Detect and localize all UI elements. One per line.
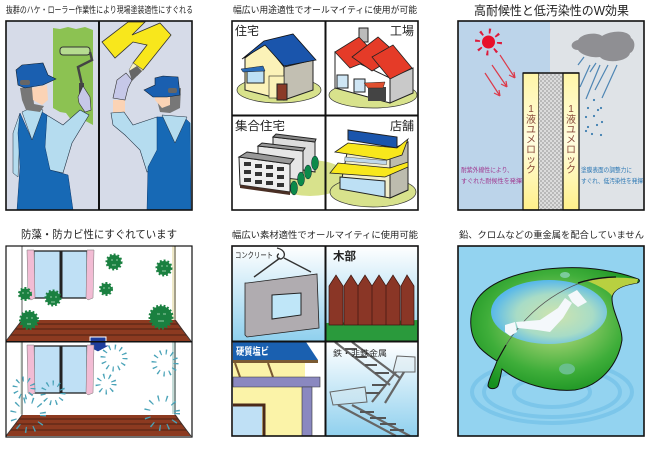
- icon: right worker: [111, 73, 191, 210]
- label: apartment: 集合住宅: [235, 118, 285, 133]
- room: before: [6, 246, 191, 341]
- panel: brush and roller painters: [6, 21, 192, 210]
- label: coating right: ク: [566, 164, 576, 176]
- cell: metal stairs: [326, 342, 418, 437]
- cell: rigid PVC: [232, 342, 325, 437]
- label: coating left: メ: [526, 135, 536, 146]
- icon: sun: [478, 31, 500, 53]
- label: house: 住宅: [235, 24, 259, 38]
- icon: house: [237, 34, 321, 103]
- icon: apartment blocks: [239, 134, 348, 196]
- caption: UV resistance: 耐紫外線性により、: [461, 165, 513, 174]
- icon: map of Japan: [505, 290, 587, 336]
- cell: metal stairs: 鉄・非鉄金属: [333, 348, 387, 358]
- icon: mold removed rings: [13, 347, 177, 430]
- icon: left worker: [13, 63, 91, 210]
- panel: building types: [232, 21, 418, 210]
- caption: stain resistance: すぐれ、低汚染性を発揮: [581, 176, 643, 185]
- cell: wood: 木部: [333, 249, 356, 263]
- label: shop: 店舗: [390, 119, 414, 133]
- caption: stain resistance: [581, 165, 643, 185]
- panel: leaf and Japan: [458, 246, 644, 436]
- panel: substrate types: [232, 246, 418, 437]
- title: anti-algae and mold: 防藻・防カビ性にすぐれています: [21, 227, 177, 241]
- label: factory: 工場: [390, 24, 414, 38]
- label: coating right: ユ: [566, 125, 576, 136]
- label: coating left: 液: [526, 114, 536, 126]
- caption: stain resistance: 塗膜表面の調整力に: [581, 165, 632, 174]
- cell: concrete: コンクリート: [235, 251, 273, 260]
- icon: mold colonies: [20, 255, 172, 328]
- icon: factory: [329, 28, 417, 108]
- wall cross section: [523, 73, 579, 210]
- label: coating left: 1: [528, 104, 534, 115]
- title: brush and roller: 抜群のハケ・ローラー作業性により現場塗装適性にすぐれる: [6, 4, 193, 15]
- panel: weather resistance diagram: [458, 21, 644, 210]
- cell: rigid PVC: 硬質塩ビ: [236, 345, 269, 358]
- cell: concrete: [232, 246, 325, 341]
- icon: shop: [330, 130, 416, 207]
- title: substrates: 幅広い素材適性でオールマイティに使用可能: [232, 229, 418, 240]
- label: coating left: ロ: [526, 145, 536, 156]
- label: coating left: ッ: [526, 155, 536, 166]
- title: W effect: 高耐候性と低汚染性のW効果: [474, 3, 629, 18]
- label: coating right: ロ: [566, 145, 576, 156]
- icon: green painted patch with roller: [53, 27, 93, 125]
- label: coating left: ク: [526, 164, 536, 176]
- arrow: after treatment: [84, 337, 111, 352]
- label: coating right: 1: [568, 104, 574, 115]
- cell: wood: [326, 246, 418, 341]
- panel: mold rooms before and after: [6, 246, 192, 437]
- arrows: ultraviolet rays: [485, 55, 515, 96]
- caption: UV resistance: [461, 165, 522, 185]
- icon: yellow painted stroke with brush: [102, 22, 171, 81]
- ripples: [472, 361, 632, 423]
- label: coating left: ユ: [526, 125, 536, 136]
- label: coating right: ッ: [566, 155, 576, 166]
- icon: leaf: [471, 268, 639, 390]
- label: coating right: メ: [566, 135, 576, 146]
- label: coating right: 液: [566, 114, 576, 126]
- icon: rain cloud: [572, 32, 634, 136]
- room: after: [6, 342, 191, 436]
- title: no heavy metals: 鉛、クロムなどの重金属を配合していません: [459, 229, 644, 240]
- title: building uses: 幅広い用途適性でオールマイティに使用が可能: [233, 4, 417, 15]
- caption: UV resistance: すぐれた耐候性を発揮: [461, 176, 522, 185]
